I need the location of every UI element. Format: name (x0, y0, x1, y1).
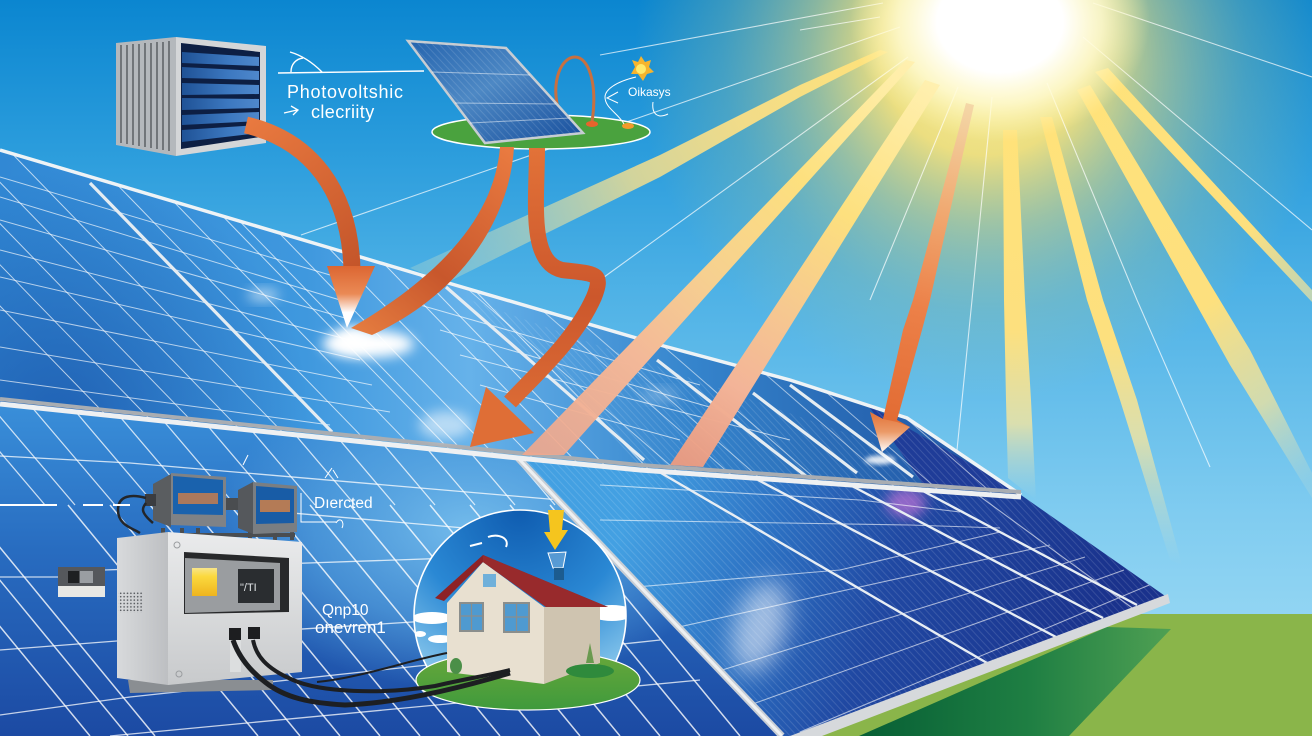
glare highlights (247, 289, 895, 464)
peach sun rays over panels (522, 60, 940, 467)
sun glow (635, 0, 1312, 400)
mini solar panel on green platform (408, 41, 650, 149)
arrow: sun to panel (870, 103, 974, 452)
small sun icon and label: Oikasys (628, 85, 671, 99)
label: photovoltaic electricity: Photovoltshic (287, 82, 404, 102)
arrows: platform to panels (351, 147, 598, 447)
sun rays behind panels (301, 3, 1312, 565)
label: directed: Dıercted (314, 495, 373, 512)
label: directed (243, 455, 373, 528)
inverter cabinet (117, 532, 302, 693)
arrow: unit to panel (246, 125, 375, 328)
cables to house (233, 640, 510, 705)
house in circular scene (412, 510, 640, 722)
panel frame lines (518, 458, 1137, 736)
solar array: lower right panels (518, 456, 1170, 736)
label: output overview: onevren1 (315, 618, 386, 637)
label: output overview: Qnp10 (322, 602, 369, 619)
small meter device (58, 567, 105, 597)
small sun icon and label (605, 56, 671, 124)
dashed wire line (0, 504, 130, 506)
solar array: upper panel (0, 148, 1022, 495)
inverter cabinet: "/TI (240, 582, 257, 594)
solar array: lower left panel (0, 400, 782, 736)
sun (850, 0, 1150, 142)
heat exchanger unit (116, 37, 266, 156)
panel frame lines (0, 150, 1021, 495)
label: photovoltaic electricity (278, 52, 424, 122)
ground (780, 614, 1312, 736)
monitors on inverter (118, 473, 297, 540)
label: photovoltaic electricity: clecriity (311, 102, 375, 122)
label: output overview (315, 602, 386, 637)
horizontal frame seam (0, 399, 1021, 497)
